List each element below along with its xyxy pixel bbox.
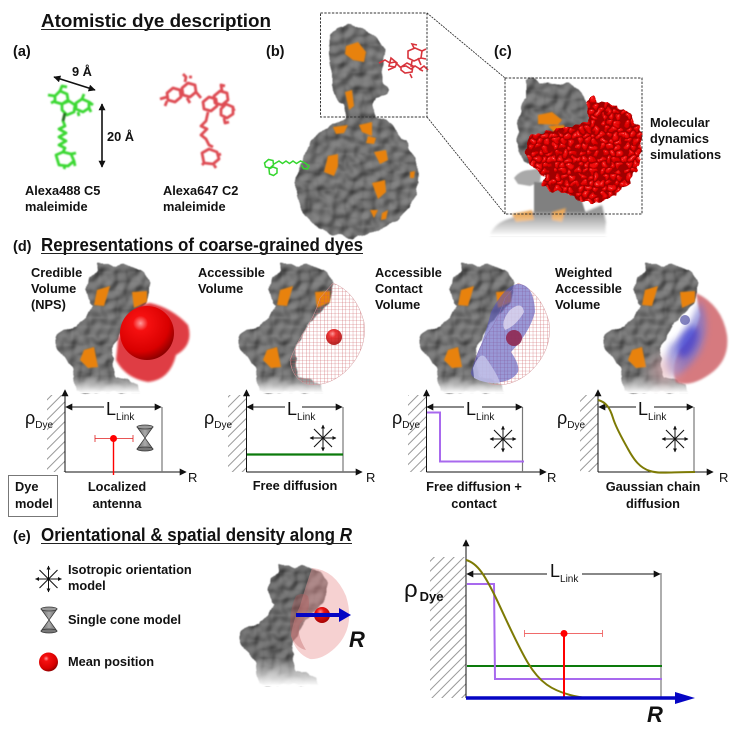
icon: mean position sphere	[39, 652, 58, 672]
dimension: 9 angstrom	[54, 64, 95, 90]
density plot: R	[719, 470, 728, 485]
density plot: Link	[648, 412, 667, 423]
combined density plot	[404, 540, 695, 727]
axes	[466, 540, 661, 698]
gaussian curve	[466, 560, 620, 698]
density plot: ρ	[204, 408, 214, 428]
zoom connector lines	[427, 13, 505, 214]
density plot: ρ	[392, 408, 402, 428]
inner contact region	[290, 594, 309, 650]
panel: accessible volume	[198, 263, 375, 493]
caption: Accessible	[198, 265, 265, 280]
fade	[240, 658, 340, 686]
protein	[240, 564, 328, 685]
blue R arrow	[296, 608, 351, 622]
heading d: (d)	[13, 239, 32, 255]
R label: R	[647, 702, 663, 727]
label (b): (b)	[266, 44, 285, 60]
panel c: molecular dynamics simulations	[480, 44, 721, 236]
contact volume with mesh	[471, 283, 550, 385]
accessible volume mesh	[290, 283, 365, 385]
density plot: L	[466, 399, 476, 419]
caption: Volume	[31, 281, 76, 296]
box: dye model: model	[15, 496, 53, 511]
density plot: L	[638, 399, 648, 419]
caption: Free diffusion +	[426, 479, 522, 494]
density plot	[557, 390, 728, 485]
lower protein fade	[490, 205, 606, 235]
protein surface	[296, 26, 418, 238]
density plot: Dye	[35, 420, 53, 431]
caption: Localized	[88, 479, 146, 494]
fade	[480, 214, 620, 236]
L link dimension: Link	[560, 574, 579, 585]
protein	[56, 263, 150, 392]
label (c): (c)	[494, 44, 512, 60]
density plot: Dye	[567, 420, 585, 431]
dimension: 20 angstrom: 20 Å	[107, 129, 134, 144]
dye: Alexa647 stick model	[160, 74, 235, 168]
panel: credible volume	[25, 263, 197, 511]
density plot: ρ	[557, 408, 567, 428]
box: dye model	[8, 476, 58, 516]
protein	[239, 263, 333, 392]
dye: green	[264, 160, 309, 176]
selection box	[320, 13, 427, 117]
density plot: Dye	[214, 420, 232, 431]
caption: Weighted	[555, 265, 612, 280]
dimension: 20 angstrom	[102, 104, 134, 167]
dye: Alexa488 stick model	[48, 86, 93, 169]
caption: Volume	[555, 297, 600, 312]
L link dimension	[467, 561, 660, 585]
panel b: labelled protein with dyes	[264, 13, 428, 238]
R label: R	[349, 627, 365, 652]
protein	[420, 263, 514, 392]
density plot	[25, 390, 197, 485]
caption: Alexa647: Alexa647 C2	[163, 183, 238, 198]
caption: Accessible	[375, 265, 442, 280]
caption: diffusion	[626, 496, 680, 511]
credible volume surface	[116, 303, 190, 382]
density plot: L	[106, 399, 116, 419]
wall hatching	[430, 557, 466, 698]
translucent volume	[291, 568, 349, 659]
heading e: Orientational & spatial density along R	[41, 525, 352, 545]
legend text: isotropic: model	[68, 578, 106, 593]
caption: Accessible	[555, 281, 622, 296]
legend text: isotropic: Isotropic orientation	[68, 562, 192, 577]
caption: antenna	[92, 496, 142, 511]
legend text: cone: Single cone model	[68, 612, 181, 627]
protein with R vector	[240, 564, 365, 686]
fade	[414, 376, 524, 393]
heading e: (e)	[13, 529, 31, 545]
dimension: 9 angstrom: 9 Å	[72, 64, 92, 79]
caption: Contact	[375, 281, 423, 296]
caption: Volume	[198, 281, 243, 296]
protein	[604, 263, 698, 392]
fade	[50, 376, 160, 393]
label (a): (a)	[13, 44, 31, 60]
free diffusion line	[467, 665, 662, 667]
caption: Alexa488: Alexa488 C5	[25, 183, 100, 198]
caption: Gaussian chain	[606, 479, 700, 494]
dashed frame	[505, 78, 642, 214]
panel a: atomic dye structures	[13, 44, 238, 214]
contact step line	[467, 584, 662, 679]
density plot: R	[547, 470, 556, 485]
protein close-up	[514, 79, 596, 214]
density plot: R	[188, 470, 197, 485]
caption: Volume	[375, 297, 420, 312]
density plot: Link	[297, 412, 316, 423]
box: dye model: Dye	[15, 479, 38, 494]
density plot	[392, 390, 556, 485]
icon: single cone	[41, 607, 57, 633]
L link dimension: L	[550, 561, 560, 581]
mean position sphere	[314, 607, 330, 623]
density plot	[204, 390, 375, 485]
density plot: R	[366, 470, 375, 485]
dye: red	[379, 44, 428, 78]
density plot: Link	[116, 412, 135, 423]
density plot: L	[287, 399, 297, 419]
density plot: ρ	[25, 408, 35, 428]
caption: simulations	[650, 147, 721, 162]
legend text: mean position: Mean position	[68, 654, 154, 669]
panel: weighted accessible volume	[555, 263, 728, 511]
heading d: Representations of coarse-grained dyes	[41, 235, 363, 255]
caption: Credible	[31, 265, 82, 280]
localized antenna marker	[524, 630, 603, 697]
density plot: Dye	[402, 420, 420, 431]
caption: Free diffusion	[253, 478, 337, 493]
caption: Alexa647: maleimide	[163, 199, 226, 214]
caption: dynamics	[650, 131, 709, 146]
density plot: Link	[476, 412, 495, 423]
fade	[598, 376, 708, 393]
y axis label: Dye	[420, 589, 444, 604]
caption: Molecular	[650, 115, 710, 130]
caption: Alexa488: maleimide	[25, 199, 88, 214]
icon: isotropic star	[36, 566, 62, 592]
fade	[233, 376, 343, 393]
red dye positions cloud	[526, 97, 642, 203]
legend	[36, 562, 192, 672]
caption: (NPS)	[31, 297, 66, 312]
y axis label: ρ	[404, 576, 418, 603]
R axis arrow	[466, 692, 695, 704]
caption: contact	[451, 496, 497, 511]
panel: accessible contact volume	[375, 263, 556, 511]
title: atomistic dye description: Atomistic dye description	[41, 11, 271, 31]
weighted density cloud	[650, 293, 727, 384]
